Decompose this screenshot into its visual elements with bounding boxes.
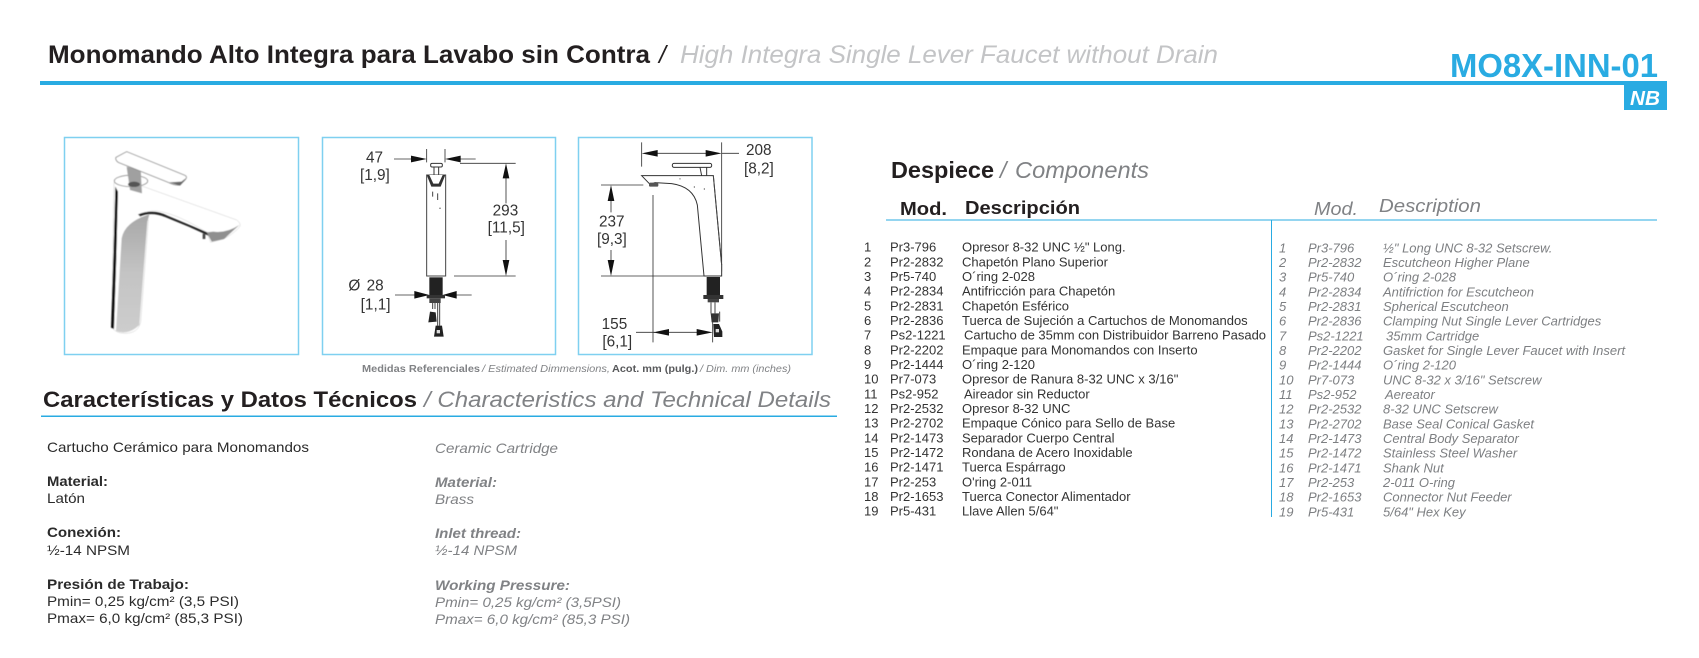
dimension: diameter 28 [1,1]: Ø xyxy=(348,278,360,295)
parts list: Spanish: Cartucho de 35mm con Distribuidor Barreno Pasado xyxy=(964,328,1266,343)
parts list: Spanish: O´ring 2-120 xyxy=(962,357,1035,372)
dimension: 47 [1,9]: [1,9] xyxy=(360,167,390,184)
caption: referenced measurements: / Dim. mm (inches) xyxy=(699,364,791,375)
parts list: English: Pr2-2202 xyxy=(1308,343,1362,358)
parts list: English: 5 xyxy=(1279,299,1287,314)
parts list: Spanish: Aireador sin Reductor xyxy=(964,386,1090,401)
parts list: English: 19 xyxy=(1279,504,1293,519)
text block: technical details in Spanish: Cartucho Cerámico para Monomandos xyxy=(47,439,309,455)
parts list: Spanish: Separador Cuerpo Central xyxy=(962,430,1115,445)
parts list: English: 5/64" Hex Key xyxy=(1383,504,1467,519)
parts list: English: 10 xyxy=(1279,372,1294,387)
text block: technical details in Spanish: Pmax= 6,0 kg/cm² (85,3 PSI) xyxy=(47,610,243,626)
text block: technical details in English: Working Pressure: xyxy=(435,577,570,593)
parts list: Spanish: 3 xyxy=(864,269,871,284)
text block: technical details in Spanish: Latón xyxy=(47,490,85,506)
parts list: English: Pr2-2832 xyxy=(1308,255,1362,270)
text block: technical details in Spanish: Material: xyxy=(47,473,108,489)
parts list: English: 18 xyxy=(1279,490,1294,505)
dimension: diameter 28 [1,1]: 28 xyxy=(367,278,384,295)
parts list: Spanish: Pr2-1444 xyxy=(890,357,943,372)
parts list: English: Aereator xyxy=(1384,387,1436,402)
parts list: English: Pr2-1472 xyxy=(1308,446,1362,461)
title: Monomando Alto Integra para Lavabo sin Contra xyxy=(48,41,651,69)
parts list: Spanish: Pr2-1472 xyxy=(890,445,943,460)
parts list: Spanish: 12 xyxy=(864,401,878,416)
text block: technical details in Spanish: Presión de Trabajo: xyxy=(47,576,189,592)
parts list: English: 15 xyxy=(1279,446,1294,461)
parts list: English: Gasket for Single Lever Faucet with Insert xyxy=(1383,343,1626,358)
parts list: English: Antifriction for Escutcheon xyxy=(1382,284,1534,299)
parts list: Spanish: Ps2-952 xyxy=(890,386,938,401)
parts list: English: Ps2-1221 xyxy=(1308,328,1364,343)
table header: English: Mod. xyxy=(1314,198,1358,219)
parts list: Spanish: Pr2-1473 xyxy=(890,430,943,445)
caption: referenced measurements: Acot. mm (pulg.) xyxy=(612,364,698,375)
parts list: Spanish: Pr7-073 xyxy=(890,372,936,387)
parts list: English: 17 xyxy=(1279,475,1294,490)
parts list: English: 2 xyxy=(1278,255,1287,270)
parts list: English: 3 xyxy=(1279,270,1287,285)
parts list: English: 12 xyxy=(1279,402,1294,417)
heading: components: Despiece xyxy=(891,157,994,183)
table header: English: Description xyxy=(1379,195,1481,216)
heading: components: Components xyxy=(1015,157,1149,183)
parts list: Spanish: Antifricción para Chapetón xyxy=(962,284,1115,299)
caption: referenced measurements xyxy=(362,364,791,375)
parts list: English: O´ring 2-028 xyxy=(1383,270,1457,285)
text block: technical details in Spanish: Conexión: xyxy=(47,524,121,540)
heading: characteristics and technical details xyxy=(43,387,831,412)
parts list: English: 35mm Cartridge xyxy=(1386,328,1479,343)
parts list: English: Connector Nut Feeder xyxy=(1383,490,1512,505)
parts list: English: ½" Long UNC 8-32 Setscrew. xyxy=(1383,240,1552,255)
parts list: Spanish: Pr2-2836 xyxy=(890,313,943,328)
dimension: 237 [9,3]: 237 xyxy=(599,214,625,231)
parts list: Spanish: Pr2-2532 xyxy=(890,401,943,416)
parts list: English: 9 xyxy=(1279,358,1286,373)
parts list: Spanish: 15 xyxy=(864,445,878,460)
parts list: English: Pr2-2831 xyxy=(1308,299,1361,314)
dimension: 155 [6,1] xyxy=(602,195,713,351)
text block: technical details in English: Brass xyxy=(435,491,474,507)
parts list: English: 14 xyxy=(1279,431,1293,446)
parts list: Spanish: O´ring 2-028 xyxy=(962,269,1035,284)
parts list: English: Escutcheon Higher Plane xyxy=(1383,255,1530,270)
parts list: English: Stainless Steel Washer xyxy=(1383,446,1518,461)
parts list: Spanish: Pr2-2202 xyxy=(890,342,943,357)
text block: technical details in English xyxy=(435,440,630,627)
parts list: Spanish: 2 xyxy=(864,254,871,269)
parts list: Spanish: Pr2-2702 xyxy=(890,416,943,431)
parts list: English: Pr2-1653 xyxy=(1308,490,1362,505)
parts list: English: Base Seal Conical Gasket xyxy=(1383,416,1535,431)
text block: technical details in English: Inlet thread: xyxy=(435,525,521,541)
parts list: English: 8 xyxy=(1279,343,1287,358)
parts list: English: 7 xyxy=(1279,328,1287,343)
parts list: Spanish: 10 xyxy=(864,372,878,387)
text block: technical details in English: ½-14 NPSM xyxy=(435,542,517,558)
table header: Spanish xyxy=(900,197,1080,219)
parts list: Spanish: O'ring 2-011 xyxy=(962,474,1032,489)
parts list: English: Pr2-1471 xyxy=(1308,460,1361,475)
parts list: Spanish: 19 xyxy=(864,504,878,519)
title xyxy=(48,41,1218,69)
parts list: English: 2-011 O-ring xyxy=(1382,475,1456,490)
parts list: Spanish: Llave Allen 5/64" xyxy=(962,504,1059,519)
heading: characteristics and technical details: Características y Datos Técnicos xyxy=(43,387,417,412)
parts list: Spanish: Tuerca Conector Alimentador xyxy=(962,489,1131,504)
parts list: Spanish: Pr2-2834 xyxy=(890,284,943,299)
parts list: English: Pr2-1444 xyxy=(1308,358,1361,373)
parts list: English: Spherical Escutcheon xyxy=(1383,299,1509,314)
text block: technical details in English: Material: xyxy=(435,474,497,490)
text block: technical details in English: Pmax= 6,0 kg/cm² (85,3 PSI) xyxy=(435,611,630,627)
parts list: Spanish: Pr2-2832 xyxy=(890,254,943,269)
panel: side dimensions drawing xyxy=(578,138,812,354)
parts list: English: UNC 8-32 x 3/16" Setscrew xyxy=(1383,372,1543,387)
parts list: Spanish: 14 xyxy=(864,430,878,445)
parts list: Spanish: 11 xyxy=(864,386,878,401)
text block: technical details in Spanish: ½-14 NPSM xyxy=(47,542,130,558)
title: High Integra Single Lever Faucet without Drain xyxy=(680,41,1218,69)
parts list: English: 8-32 UNC Setscrew xyxy=(1383,402,1499,417)
parts list: Spanish: 18 xyxy=(864,489,878,504)
table header: Spanish: Mod. xyxy=(900,198,947,219)
parts list: English: Pr7-073 xyxy=(1308,372,1355,387)
parts list: Spanish: Chapetón Esférico xyxy=(962,298,1069,313)
text block: technical details in Spanish xyxy=(47,439,309,626)
finish badge: NB: NB xyxy=(1630,88,1660,110)
parts list: English: Pr2-1473 xyxy=(1308,431,1362,446)
parts list: English: Pr3-796 xyxy=(1308,240,1355,255)
parts list: Spanish: Opresor 8-32 UNC ½" Long. xyxy=(962,240,1126,255)
parts list: Spanish: 5 xyxy=(864,298,871,313)
dimension: 293 [11,5] xyxy=(454,163,525,276)
heading: components: / xyxy=(998,157,1009,183)
parts list: Spanish: 17 xyxy=(864,474,878,489)
parts list: Spanish: Chapetón Plano Superior xyxy=(962,254,1109,269)
caption: referenced measurements: / Estimated Dimmensions, xyxy=(481,364,610,375)
parts list: Spanish: Pr5-740 xyxy=(890,269,936,284)
table header: Spanish: Descripción xyxy=(965,197,1080,218)
dimension: 208 [8,2]: [8,2] xyxy=(744,160,774,177)
parts list: English: Pr5-431 xyxy=(1308,504,1354,519)
parts list: English: Pr2-2702 xyxy=(1308,416,1362,431)
dimension: 208 [8,2]: 208 xyxy=(746,142,772,159)
heading: characteristics and technical details: / Characteristics and Technical Details xyxy=(422,387,831,412)
parts list: Spanish: Ps2-1221 xyxy=(890,328,946,343)
parts list: English: Pr2-253 xyxy=(1308,475,1355,490)
dimension: 47 [1,9]: 47 xyxy=(366,150,383,167)
parts list: English: Pr5-740 xyxy=(1308,270,1355,285)
parts list: Spanish xyxy=(864,240,1266,519)
panel: faucet photo xyxy=(64,138,298,354)
text block: technical details in English: Ceramic Cartridge xyxy=(435,440,558,456)
caption: referenced measurements: Medidas Referenciales xyxy=(362,364,480,375)
parts list: Spanish: 13 xyxy=(864,416,878,431)
parts list: Spanish: Tuerca Espárrago xyxy=(962,460,1066,475)
parts list: Spanish: Rondana de Acero Inoxidable xyxy=(962,445,1133,460)
text block: technical details in Spanish: Pmin= 0,25 kg/cm² (3,5 PSI) xyxy=(47,593,239,609)
parts list: English: Clamping Nut Single Lever Cartridges xyxy=(1383,314,1602,329)
parts list: Spanish: Opresor de Ranura 8-32 UNC x 3/16" xyxy=(962,372,1179,387)
title: / xyxy=(657,41,669,69)
parts list: Spanish: 7 xyxy=(864,328,871,343)
dimension: diameter 28 [1,1] xyxy=(348,278,472,313)
parts list: English: Central Body Separator xyxy=(1383,431,1520,446)
parts list: Spanish: Pr2-253 xyxy=(890,474,936,489)
finish badge: NB xyxy=(1624,83,1667,110)
parts list: English: O´ring 2-120 xyxy=(1383,358,1457,373)
parts list: English: Pr2-2532 xyxy=(1308,402,1362,417)
parts list: Spanish: Pr3-796 xyxy=(890,240,936,255)
dimension: 237 [9,3] xyxy=(597,185,704,276)
parts list: Spanish: 9 xyxy=(864,357,871,372)
dimension: 47 [1,9] xyxy=(360,149,476,184)
parts list: Spanish: Empaque Cónico para Sello de Base xyxy=(962,416,1175,431)
faucet front view xyxy=(427,163,446,337)
parts list: English: 1 xyxy=(1279,240,1286,255)
parts list: Spanish: Empaque para Monomandos con Inserto xyxy=(962,342,1198,357)
parts list: English xyxy=(1278,240,1626,519)
parts list: Spanish: 8 xyxy=(864,342,871,357)
panel: front dimensions drawing xyxy=(322,138,556,354)
parts list: Spanish: Pr5-431 xyxy=(890,504,936,519)
icon: chrome faucet xyxy=(111,152,240,333)
parts list: English: Ps2-952 xyxy=(1308,387,1357,402)
parts list: Spanish: Pr2-2831 xyxy=(890,298,943,313)
parts list: English: 6 xyxy=(1279,314,1287,329)
text block: technical details in English: Pmin= 0,25 kg/cm² (3,5PSI) xyxy=(435,594,621,610)
parts list: English: 13 xyxy=(1279,416,1294,431)
parts list: English: 11 xyxy=(1279,387,1292,402)
parts list: Spanish: 6 xyxy=(864,313,871,328)
dimension: 155 [6,1]: [6,1] xyxy=(602,334,632,351)
parts list: English: 16 xyxy=(1279,460,1294,475)
dimension: 208 [8,2] xyxy=(642,142,774,272)
dimension: 293 [11,5]: 293 xyxy=(493,203,518,220)
dimension: 237 [9,3]: [9,3] xyxy=(597,231,627,248)
parts list: English: Pr2-2836 xyxy=(1308,314,1362,329)
faucet side view xyxy=(642,163,723,337)
parts list: Spanish: 1 xyxy=(864,240,871,255)
parts list: Spanish: Tuerca de Sujeción a Cartuchos de Monomandos xyxy=(962,313,1248,328)
parts list: Spanish: 4 xyxy=(864,284,871,299)
dimension: 293 [11,5]: [11,5] xyxy=(488,219,525,236)
parts list: English: Pr2-2834 xyxy=(1308,284,1361,299)
parts list: English: Shank Nut xyxy=(1383,460,1445,475)
heading: components xyxy=(891,157,1149,183)
model code: MO8X-INN-01 xyxy=(1450,47,1658,84)
parts list: Spanish: Pr2-1471 xyxy=(890,460,943,475)
parts list: Spanish: Pr2-1653 xyxy=(890,489,943,504)
parts list: Spanish: 16 xyxy=(864,460,878,475)
table header: English xyxy=(1314,195,1481,219)
dimension: diameter 28 [1,1]: [1,1] xyxy=(361,296,390,313)
parts list: English: 4 xyxy=(1279,284,1286,299)
parts list: Spanish: Opresor 8-32 UNC xyxy=(962,401,1070,416)
dimension: 155 [6,1]: 155 xyxy=(602,316,627,333)
